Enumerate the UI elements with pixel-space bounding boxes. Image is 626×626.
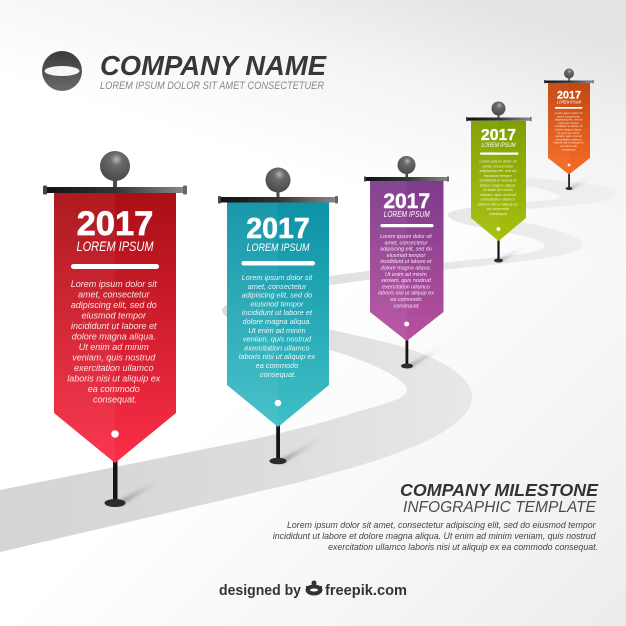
- body text: Lorem ipsum dolor sit: [479, 158, 517, 164]
- body text: exercitation ullamco: [556, 137, 582, 141]
- subtitle: LOREM IPSUM: [482, 142, 516, 149]
- body text: Ut enim ad minim: [79, 342, 149, 352]
- milestone heading: COMPANY MILESTONE: [400, 480, 599, 500]
- pole and shadow: [401, 340, 448, 368]
- body text: consequat.: [93, 394, 137, 404]
- panel: purple banner: [364, 156, 449, 368]
- body text: laboris nisi ut aliquip ex: [239, 352, 315, 361]
- body text: Lorem ipsum dolor sit: [555, 111, 583, 115]
- logo icon: [42, 51, 82, 91]
- body text: eiusmod tempor: [387, 253, 425, 259]
- banner body: [54, 193, 176, 463]
- body text: incididunt ut labore et: [555, 124, 583, 128]
- body text: Ut enim ad minim: [483, 187, 514, 192]
- pole and shadow: [566, 173, 592, 190]
- body text: dolore magna aliqua.: [242, 317, 311, 326]
- subtitle: LOREM IPSUM: [246, 242, 310, 254]
- body text: amet, consectetur: [248, 282, 307, 291]
- pole and shadow: [104, 460, 165, 507]
- banner body: [370, 181, 444, 341]
- body text: Ut enim ad minim: [385, 272, 427, 278]
- body text: ea commodo: [560, 144, 577, 148]
- divider bar: [380, 224, 434, 227]
- company name heading: COMPANY NAME: [100, 50, 327, 81]
- banner dot: [111, 430, 119, 438]
- divider bar: [555, 107, 582, 109]
- milestone subheading: INFOGRAPHIC TEMPLATE: [403, 499, 597, 516]
- body text: veniam, quis nostrud: [381, 278, 432, 284]
- body text: exercitation ullamco: [382, 284, 430, 290]
- subtitle: LOREM IPSUM: [557, 100, 581, 104]
- banner body: [227, 202, 329, 427]
- body text: adipiscing elit, sed do: [380, 247, 432, 253]
- year: 2017: [383, 190, 430, 213]
- body text: adipiscing elit, sed do: [242, 291, 312, 300]
- body text: ea commodo: [88, 384, 140, 394]
- body text: laboris nisi ut aliquip ex: [554, 141, 584, 145]
- body text: consequat.: [394, 303, 420, 309]
- body text: exercitation ullamco: [481, 196, 516, 202]
- body text: Ut enim ad minim: [248, 326, 306, 335]
- body text: ea commodo: [487, 206, 510, 211]
- body text: dolore magna aliqua.: [555, 128, 582, 132]
- body text: Lorem ipsum dolor sit: [242, 273, 313, 282]
- pole and shadow: [494, 240, 527, 262]
- body text: consequat.: [260, 370, 296, 379]
- milestone description: exercitation ullamco laboris nisi ut aliquip ex ea commodo consequat.: [328, 542, 598, 552]
- banner hanger with ball: [43, 151, 187, 194]
- year: 2017: [481, 127, 516, 144]
- body text: incididunt ut labore et: [71, 321, 157, 331]
- divider bar: [242, 261, 315, 266]
- body text: veniam, quis nostrud: [555, 134, 582, 138]
- body text: laboris nisi ut aliquip ex: [478, 201, 519, 206]
- body text: veniam, quis nostrud: [243, 335, 312, 344]
- banner hanger with ball: [544, 68, 594, 83]
- body text: adipiscing elit, sed do: [555, 118, 583, 122]
- banner dot: [404, 322, 409, 326]
- subtitle: LOREM IPSUM: [76, 239, 154, 254]
- subtitle: LOREM IPSUM: [384, 210, 430, 219]
- icon: freepik mascot: [306, 580, 322, 596]
- body text: eiusmod tempor: [484, 173, 513, 178]
- milestone description: Lorem ipsum dolor sit amet, consectetur adipiscing elit, sed do eiusmod tempor: [287, 520, 597, 530]
- body text: exercitation ullamco: [244, 343, 310, 352]
- panel: green banner: [466, 102, 532, 262]
- body text: eiusmod tempor: [81, 310, 147, 320]
- body text: consequat.: [489, 211, 508, 216]
- body text: amet, consectetur: [385, 240, 428, 246]
- panel: teal banner: [218, 168, 338, 464]
- body text: laboris nisi ut aliquip ex: [67, 374, 161, 384]
- body text: amet, consectetur: [482, 163, 514, 168]
- designed by credit: designed by: [219, 583, 301, 599]
- body text: dolore magna aliqua.: [72, 332, 156, 342]
- company tagline: LOREM IPSUM DOLOR SIT AMET CONSECTETUER: [100, 80, 324, 92]
- body text: incididunt ut labore et: [479, 178, 517, 182]
- body text: eiusmod tempor: [250, 299, 304, 308]
- banner body: [471, 121, 526, 241]
- body text: exercitation ullamco: [74, 363, 154, 373]
- banner hanger with ball: [466, 102, 532, 121]
- panel: orange banner: [544, 68, 594, 190]
- milestone description: incididunt ut labore et dolore magna aliqua. Ut enim ad minim veniam, quis nostrud: [273, 531, 597, 541]
- body text: adipiscing elit, sed do: [71, 300, 157, 310]
- divider bar: [480, 152, 518, 155]
- year: 2017: [77, 205, 153, 243]
- banner hanger with ball: [364, 156, 449, 182]
- body text: Ut enim ad minim: [557, 131, 580, 135]
- body text: laboris nisi ut aliquip ex: [378, 291, 434, 297]
- body text: ea commodo: [390, 297, 422, 303]
- freepik brand: freepik.com: [325, 582, 407, 599]
- body text: veniam, quis nostrud: [72, 352, 156, 362]
- body text: dolore magna aliqua.: [381, 266, 431, 272]
- year: 2017: [557, 90, 581, 102]
- body text: amet, consectetur: [78, 290, 151, 300]
- body text: adipiscing elit, sed do: [479, 168, 517, 173]
- body text: amet, consectetur: [557, 114, 581, 118]
- pole and shadow: [270, 425, 325, 464]
- panel: red banner: [43, 151, 187, 507]
- body text: ea commodo: [256, 361, 298, 370]
- body text: incididunt ut labore et: [380, 259, 432, 265]
- banner body: [548, 83, 590, 174]
- banner dot: [497, 227, 500, 231]
- body text: eiusmod tempor: [558, 121, 580, 125]
- body text: Lorem ipsum dolor sit: [380, 234, 432, 240]
- banner dot: [568, 164, 570, 166]
- body text: consequat.: [562, 147, 576, 151]
- divider bar: [71, 264, 159, 269]
- body text: Lorem ipsum dolor sit: [71, 279, 157, 289]
- year: 2017: [246, 213, 310, 245]
- winding road: [0, 178, 617, 552]
- banner dot: [275, 400, 281, 406]
- body text: incididunt ut labore et: [242, 308, 313, 317]
- banner hanger with ball: [218, 168, 338, 204]
- body text: veniam, quis nostrud: [480, 192, 517, 197]
- body text: dolore magna aliqua.: [480, 182, 516, 187]
